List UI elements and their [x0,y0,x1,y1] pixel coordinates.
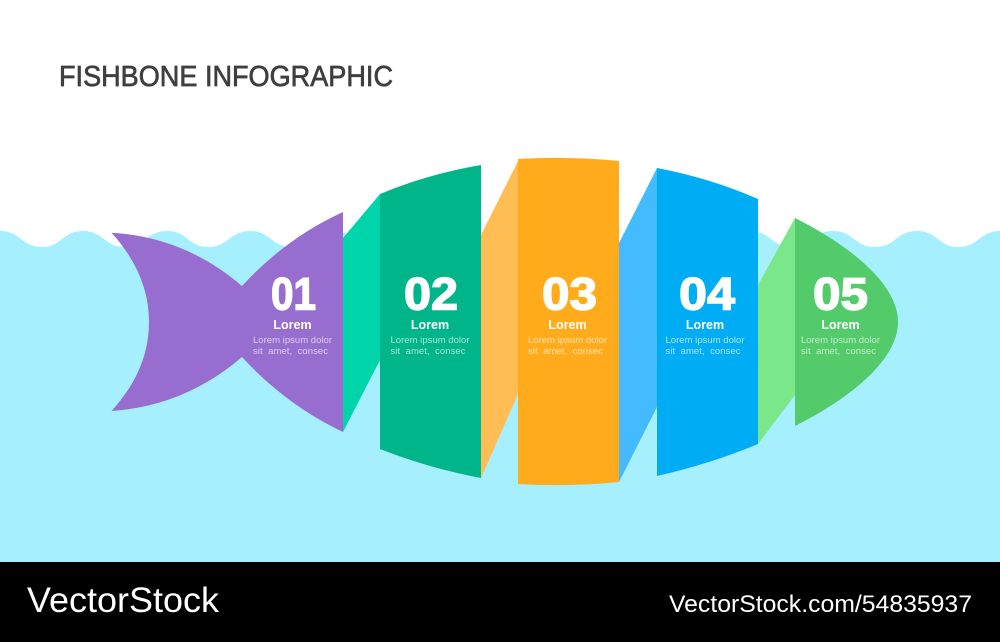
segment 03: orange panel [518,158,619,485]
segment 04: blue panel: sit amet, consec [666,346,741,357]
segment 01: purple tail: sit amet, consec [253,346,328,357]
footer url: VectorStock.com/54835937 [669,591,972,618]
segment 02: teal fold [343,194,380,432]
segment 04: light blue fold [619,168,657,482]
heading 01: Lorem [273,318,312,332]
segment 05: green head: sit amet, consec [801,346,876,357]
water background [0,231,1000,562]
number 01: 01 [271,268,316,320]
body text 03: Lorem ipsum dolor [528,335,607,346]
number 02: 02 [404,268,458,320]
heading 05: Lorem [821,318,860,332]
segment 03: orange panel: sit amet, consec [528,346,603,357]
body text 05: Lorem ipsum dolor [801,335,880,346]
heading 02: Lorem [411,318,449,332]
number 05: 05 [813,268,868,320]
number 03: 03 [542,268,597,320]
number 04: 04 [679,268,735,320]
body text 01: Lorem ipsum dolor [253,335,332,346]
segment 01: purple tail [112,212,343,432]
body text 02: Lorem ipsum dolor [390,335,470,346]
footer logo: VectorStock [27,581,220,620]
footer bar [0,562,1000,642]
heading 04: Lorem [686,318,724,332]
segment 04: blue panel [657,168,758,476]
segment 02: green panel: sit amet, consec [390,346,466,357]
segment 03: amber fold [481,159,519,478]
segment 05: light green fold [758,218,795,444]
title: FISHBONE INFOGRAPHIC [59,61,393,93]
segment 02: green panel [380,165,481,478]
segment 05: green head [795,218,898,426]
body text 04: Lorem ipsum dolor [666,335,744,346]
heading 03: Lorem [548,318,587,332]
